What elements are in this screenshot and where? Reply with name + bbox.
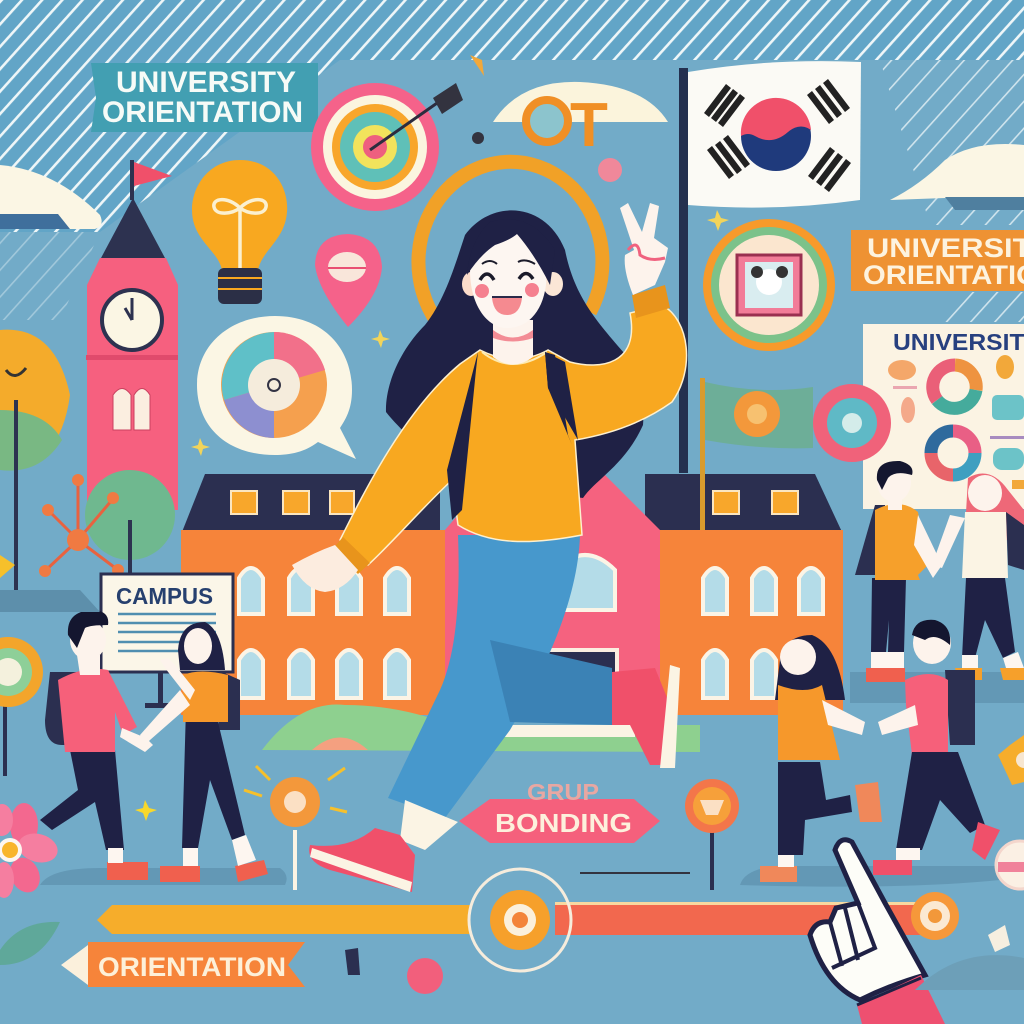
- text: OT with cloud: [493, 82, 668, 160]
- campus sign: CAMPUS: [116, 583, 213, 609]
- speech bubble with color wheel: [197, 316, 356, 459]
- students pair right upper: [855, 461, 1024, 682]
- main building: [181, 378, 843, 715]
- small target lollipop right: [685, 779, 739, 890]
- girl: [760, 635, 882, 882]
- green lawn: [262, 705, 700, 752]
- icon: teal pennant: [705, 382, 813, 448]
- icon: location pin: [315, 234, 382, 327]
- students pair left: [40, 610, 268, 882]
- text: OT with cloud: T: [570, 91, 608, 160]
- person: main student: [292, 203, 687, 892]
- decorative cloud right: [890, 144, 1024, 210]
- icon: tree and yellow balloon left: [0, 330, 70, 590]
- girl: [932, 474, 1024, 680]
- girl: [140, 622, 268, 882]
- campus sign: [101, 574, 233, 708]
- banner: group bonding: BONDING: [495, 808, 632, 838]
- backpack straps: [447, 352, 572, 520]
- icon: pink circular badge: [813, 384, 891, 462]
- icon: round photo badge: [703, 219, 835, 351]
- icon: Korean flag: [679, 61, 861, 473]
- hand: left: [292, 545, 358, 592]
- donut chart top: [933, 365, 976, 408]
- icon: molecule and tree: [39, 470, 175, 580]
- progress bar: timeline: [97, 869, 959, 971]
- boy: [855, 461, 942, 682]
- small target lollipop left: [244, 766, 347, 890]
- students pair right lower: [760, 620, 1000, 882]
- icon: target with arrow: [311, 83, 463, 211]
- banner: University Orientation top left: UNIVERSITY: [116, 66, 296, 99]
- icon: pointing hand: [810, 840, 945, 1024]
- chart board right: [863, 324, 1024, 509]
- icon: right edge flower and badge: [996, 735, 1024, 889]
- icon: light bulb: [192, 160, 287, 304]
- face: [462, 219, 563, 364]
- icon: flower: [0, 803, 61, 965]
- shoes: [309, 665, 680, 892]
- sweater: [332, 285, 687, 574]
- hair back: [386, 210, 643, 498]
- banner: orientation: [61, 942, 305, 987]
- legs: [388, 535, 612, 850]
- ground shadows: [40, 672, 1024, 887]
- icon: left edge badge: [0, 637, 43, 776]
- hand: peace sign: [620, 203, 668, 295]
- decorative cloud left: [0, 165, 102, 229]
- donut chart bottom: [931, 431, 975, 475]
- banner: University Orientation top left: ORIENTATION: [102, 96, 303, 129]
- icon: clock tower: [86, 160, 178, 510]
- banner: orientation: ORIENTATION: [98, 952, 286, 982]
- banner: University Orientation top left: [91, 63, 318, 132]
- banner: group bonding: [459, 779, 660, 843]
- banner: University Orientation right: [851, 230, 1024, 291]
- boy: [873, 620, 1000, 875]
- banner: group bonding: GRUP: [527, 779, 599, 805]
- boy: [40, 610, 153, 880]
- icon: golden halo ring: [418, 162, 602, 322]
